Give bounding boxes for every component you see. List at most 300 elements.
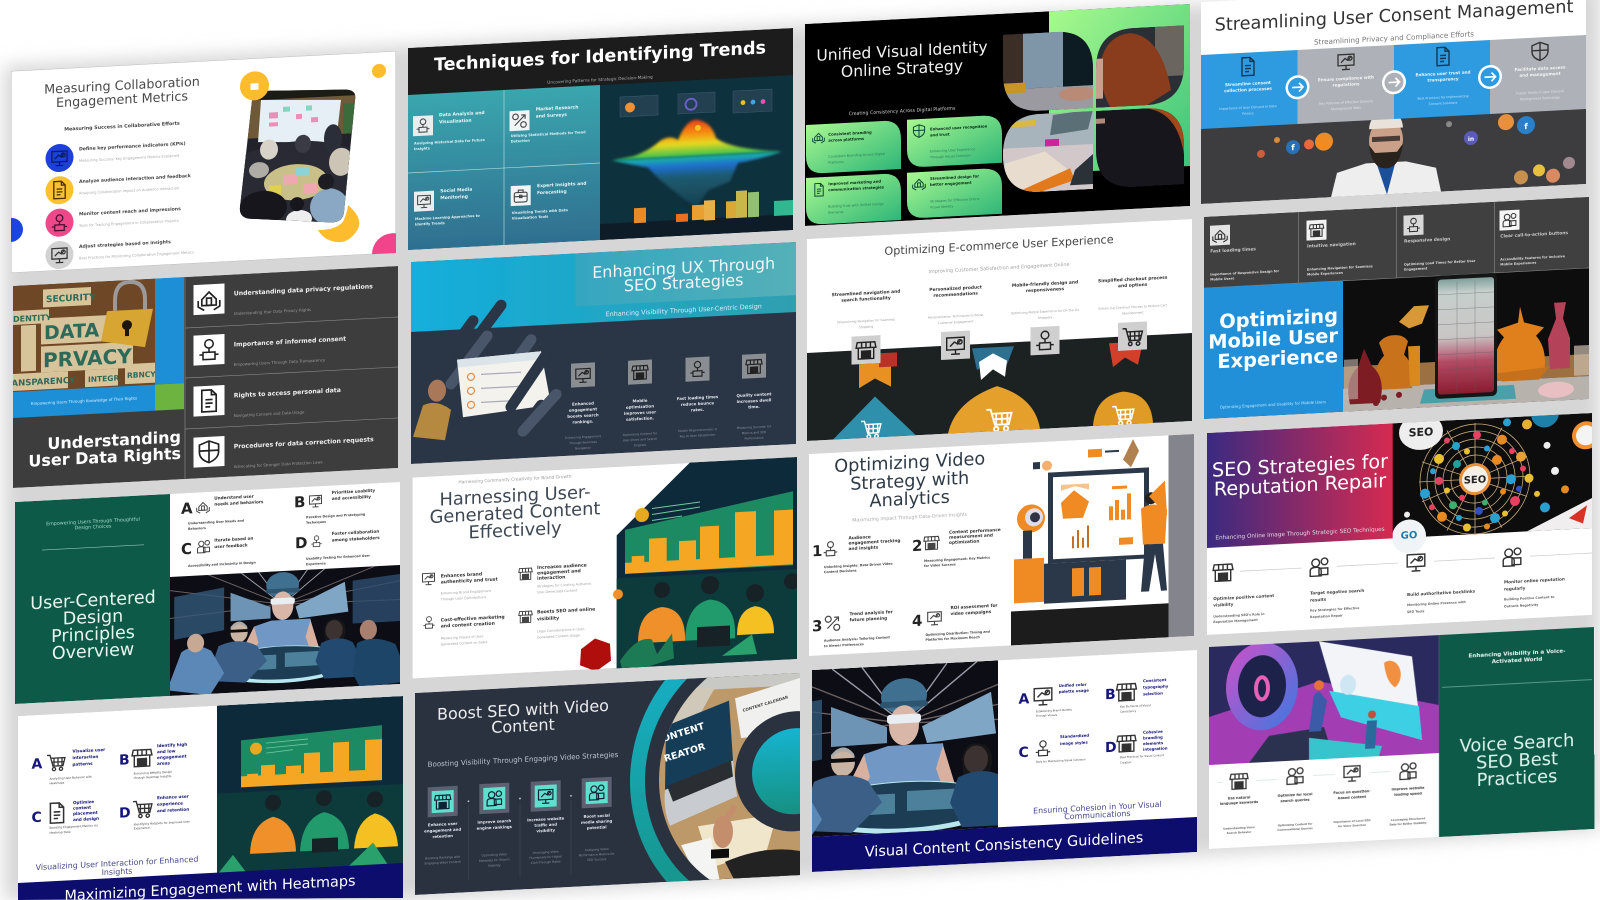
column: retention: Engaging Video Content [425,860,462,866]
item D: D [119,805,131,822]
tip: keywords: Search Behavior [1227,830,1252,835]
illustration: audience watching bar chart [613,457,800,669]
slide: Unified Visual Identity Online Strategy [805,4,1190,226]
column 2 [1318,53,1374,112]
metric row: adjust: Best Practices for Monitoring Collaborative Engagement Metrics [79,250,194,260]
step: positive content [1213,562,1274,624]
item: marketing: Generated Content on Sales [441,640,488,647]
side panel: SEO Best [1476,748,1558,774]
benefit: quality: increases dwell [737,397,772,404]
card: social media [414,186,480,227]
item 1 [812,533,900,575]
column: rankings: engine rankings [477,824,513,831]
item B: B [1105,687,1116,703]
item D: branding [1143,734,1163,740]
subheading: Maximizing Impact Through Data-Driven Insights [852,512,968,524]
illustration: analytics monitor and analyst [1014,437,1167,605]
subheading [1033,800,1162,823]
decorative yellow circle [372,64,386,78]
item A: Unified color [1059,682,1087,688]
principle C [181,535,256,568]
column: navigation: search functionality [841,295,891,304]
item D: integration [1143,746,1168,752]
metric row: KPIs: Define key performance indicators (KPIs) [79,141,186,152]
photo petal: red hair woman [1096,25,1184,109]
item D: Experience [134,826,150,830]
feature strip [1204,197,1589,288]
item 4 [912,603,998,643]
column 3 [1415,46,1471,107]
item: marketing: Measuring Impact of User- [441,634,485,641]
column: mobile-friendly [1011,279,1079,356]
card: expert insights [511,181,587,221]
card: market research: and Surveys [536,112,567,120]
tip: local: search queries [1280,798,1310,803]
principle B: Techniques [306,520,326,525]
item 1: 1 [812,542,822,560]
principle A: Understand user [214,494,255,501]
card: expert insights: Expert Insights and [537,181,587,189]
feature: fast loading: Mobile Users [1210,276,1234,282]
column: checkout: Abandonment [1122,310,1144,316]
column 3: transparency [1427,76,1459,83]
title box [576,242,796,306]
row: informed consent: Importance of informed consent [234,336,346,349]
feature: intuitive: Mobile Experiences [1307,271,1343,277]
card: branding: Platforms [828,160,844,165]
step: backlinks: SEO Tools [1407,609,1425,614]
column: mobile-friendly: Shoppers [1038,315,1053,320]
item: audience: User-Generated Content [537,588,578,594]
benefit: engagement: boosts search [567,412,599,419]
item A: Through Visuals [1035,713,1058,718]
column: rankings: Optimizing Video [482,852,507,858]
tip: loading speed [1389,762,1427,827]
column: retention: Boosting Rankings with [425,855,460,860]
title band [18,863,403,900]
column: checkout: and options [1118,282,1148,289]
side panel [15,494,170,704]
principle D: Experience [306,561,326,566]
item C: image styles [1060,740,1088,746]
card: data analysis: Insights [414,146,430,151]
feature: call to action: Mobile Experiences [1500,261,1536,267]
item: audience: engagement and [537,568,581,576]
GO badge [1392,519,1426,554]
heading [437,696,609,740]
item 3: future planning [850,615,887,623]
item: authenticity: Through User Contributions [440,595,486,602]
column: traffic: Increase website [527,816,565,822]
tip: loading speed: Improve website [1392,786,1425,792]
item C [32,799,99,836]
slide: Techniques for Identifying Trends [408,28,793,250]
item: authenticity: Enhances brand [441,571,482,580]
card: market research [510,104,586,144]
tip: local [1277,767,1313,832]
principle B: Iterative Design and Prototyping [306,512,366,519]
green accent [155,383,184,411]
photo: data privacy blocks and padlock: DATA [44,320,99,344]
benefit: engagement: Navigation [575,446,591,450]
item A: A [32,756,42,773]
row: informed consent: Empowering Users Through Data Transparency [234,357,326,367]
card: streamlined: better engagement [930,180,972,187]
chart image: rainbow data visualization [600,75,793,240]
blue side bar [155,277,184,385]
card: data analysis: Data Analysis and [439,110,485,118]
tip: local: Conversational Queries [1277,826,1313,832]
image: SEO network globe [1392,397,1600,554]
metric row: adjust: Adjust strategies based on insights [79,239,171,250]
item D [119,794,191,831]
bar chart on screen [247,739,382,778]
heading: Analytics [870,488,950,512]
row: correction: Procedures for data correction requests [234,436,374,451]
photo: man on phone with social icons: f [1291,143,1295,152]
benefit: quality: Metrics and SEO [742,430,767,435]
item 2: measurement and [949,532,993,541]
side panel: Enhancing Visibility in a Voice- [1469,648,1566,660]
photo: man on phone with social icons: in [1468,136,1474,143]
photo: data privacy blocks and padlock: RANSPARENCY [5,376,76,389]
photo: woman in helmet with team [732,645,1092,864]
photo: data privacy blocks and padlock: DENTITY [13,313,52,324]
benefit: quality: Quality content [737,391,772,398]
column 2: Ensure compliance with [1318,75,1374,82]
dashboard cards [620,89,772,119]
benefit: mobile: Engines [634,443,646,447]
item A: patterns [72,761,93,767]
column: retention [424,786,462,866]
step: negative results: results [1310,597,1327,603]
card: data analysis: Analyzing Historical Data for Future [414,138,486,146]
benefit: mobile [623,359,658,448]
principle A: needs and behaviors [214,499,264,507]
card: data analysis: Visualization [439,118,472,125]
card: data analysis [413,110,486,151]
item: audience: Increases audience [537,562,587,571]
card: branding: Consistent branding [828,130,872,137]
teal ring [630,605,950,900]
benefit: mobile: optimization [626,403,654,410]
feature: fast loading: Importance of Responsive Design for [1210,269,1279,277]
row: access: Rights to access personal data [234,387,341,400]
slide: Maximizing Engagement with Heatmaps [18,696,403,900]
principle A: Behaviors [188,526,206,531]
slide: Measuring Collaboration Engagement Metrics [11,51,396,273]
column: retention: retention [432,833,453,839]
card: social media: Machine Learning Approaches to [415,214,480,221]
audience [250,794,296,854]
illustration: diagonal bars and checklist [413,302,556,462]
item: audience: Strategies for Curating Authentic [537,582,592,588]
row: access: Navigating Consent and Data Usage [234,409,305,418]
subheading: Visualizing User Interaction for Enhanced [36,855,198,872]
heading: Harnessing User- [440,482,590,511]
dark inner ring [645,626,925,900]
SEO label: SEO [1464,474,1486,487]
column: rankings: Improve search [477,818,512,825]
feature: fast loading [1210,222,1279,282]
side panel: Overview [52,640,134,664]
item 1: Unlocking Insights: Data-Driven Video [824,562,893,569]
column 3: Enhance user trust and [1415,69,1471,77]
column: checkout [1098,275,1168,352]
benefit: engagement: Through Seamless [568,440,597,445]
subheading: Streamlining Privacy and Compliance Efforts [1314,29,1474,47]
title panel: Enhancing Online Image Through Strategic SEO Techniques [1215,527,1385,542]
feature: intuitive [1306,217,1373,277]
card: marketing [806,173,901,225]
tip: loading speed: Data for Better Visibility [1389,821,1427,827]
item B: Consistent [1143,677,1167,683]
item C: Boosting Engagement Metrics via [50,823,98,830]
illustration: audience watching bar chart [217,696,403,874]
item C: Standardized [1060,733,1089,739]
item: SEO: Generated Content Usage [537,633,580,639]
feature: responsive: Responsive design [1404,236,1450,245]
column: traffic: Leveraging Video [533,850,559,855]
item: marketing: Cost-effective marketing [441,614,505,624]
slide: Understanding User Data Rights [5,266,398,488]
card: streamlined: Streamlined design for [930,173,979,181]
title band [812,817,1197,872]
principle B [294,488,375,525]
benefit: engagement: Enhanced [572,400,594,407]
title panel [1207,423,1393,548]
heading: Strategy with [850,469,969,495]
item 4: Optimizing Distribution: Timing and [926,630,991,637]
card: marketing: Improved marketing and [828,179,881,186]
tip: keywords: Understanding Voice [1223,825,1255,831]
subheading: Measuring Success in Collaborative Efforts [64,121,180,133]
photo: phone and vases [1343,268,1589,412]
photo: laptop content creator: CONTENT CALENDAR [742,694,789,713]
principle A [181,493,264,531]
benefit: mobile: satisfaction. [626,415,654,422]
principle A: A [181,499,193,518]
column: social sharing: media sharing [581,818,613,825]
column: social sharing: SEO Success [587,857,607,862]
benefit: engagement: rankings. [572,418,594,425]
principle D [295,529,380,567]
benefit: engagement: Enhancing Engagement [565,434,602,440]
step: backlinks: Monitoring Online Presence with [1407,600,1467,607]
side panel [1439,627,1594,837]
feature: responsive: Engagement [1404,266,1428,272]
metric row: audience: Analyze audience interaction and feedback [79,173,192,185]
item B: areas [157,760,171,766]
illustration: shopping cart badges [833,378,1153,440]
item 2: Content performance [949,527,1001,536]
column: personalized: Personalization Techniques to Boost [928,313,984,320]
subheading: Communications [1064,809,1131,821]
principle B: B [294,493,305,511]
photo: team around table [240,90,356,222]
row: informed consent [194,328,346,369]
card: social media: Identify Trends [415,221,445,227]
metric row: reach [46,207,181,237]
card: marketing: Building Trust with Unified Design [828,202,884,209]
item 4: ROI assessment for [950,603,998,611]
item 3 [812,609,894,649]
column 4: Facilitate data access [1514,65,1566,72]
column: mobile-friendly: Optimizing Mobile Experience for On-the-Go [1011,308,1079,315]
item D: Cohesive [1143,729,1163,735]
item 3: 3 [812,617,822,635]
heading: Understanding [47,427,181,453]
column 1: Importance of User Consent in Data [1219,104,1277,111]
column 3: Best Practices for Implementing [1417,94,1469,101]
slide: Boost SEO with Video Content [415,605,950,900]
step: monitor: Building Positive Content to [1504,595,1555,602]
item D: Identifying Hotspots for Improved User [134,820,191,826]
item 4: 4 [912,612,922,630]
item A: Visualize user [72,747,106,754]
photo: man on phone with social icons: f [1524,122,1528,131]
item B: Key Elements of Visual [1120,703,1151,709]
heading: Engagement Metrics [56,89,188,111]
item B: engagement [157,754,187,760]
item 2: 2 [912,537,922,555]
heading: Online Strategy [841,57,963,81]
subheading: Creating Consistency Across Digital Platforms [849,106,956,117]
item 4: video campaigns [950,609,992,617]
subheading: Enhancing Visibility Through User-Centric Design [606,302,762,318]
title panel: Reputation Repair [1214,469,1386,501]
step: negative results: Reputation Repair [1310,613,1343,619]
side panel: Voice Search [1460,730,1574,757]
slide: Streamlining User Consent Management [1201,0,1586,204]
row: privacy regulations: Understanding data privacy regulations [234,283,373,298]
card: recognition: Enhancing User Experience [930,147,975,153]
feature: call to action [1500,207,1568,267]
heading: Measuring Collaboration [44,75,200,98]
metric row: KPIs [46,142,186,172]
side panel: Principles [51,623,135,647]
heading [28,427,181,471]
subheading: Improving Customer Satisfaction and Engagement Online [929,262,1069,275]
metric row: KPIs: Measuring Success: Key Engagement Metrics Explained [79,154,179,163]
benefit: loading: reduce bounce [681,400,714,407]
item 1: Content Decisions [824,569,857,574]
column: traffic: visibility [536,827,556,833]
photo: woman in helmet with team [160,549,417,705]
side panel: Activated World [1492,657,1542,665]
title panel: Experience [1217,344,1338,373]
item 3: to Viewer Preferences [824,642,864,648]
column: rankings [477,782,513,868]
principle C: user feedback [214,542,248,549]
card: branding [806,120,901,174]
column 2: Management Tools [1331,106,1361,111]
item A: interaction [72,754,98,760]
item B: typography [1143,683,1169,690]
slide: Enhancing UX Through SEO Strategies [411,242,796,464]
column: personalized: recommendations [933,291,978,299]
column: mobile-friendly: Mobile-friendly design and [1012,279,1078,289]
item C: placement [73,810,98,816]
slide: Optimizing E-commerce User Experience [807,219,1192,441]
heading: Unified Visual Identity [816,38,988,65]
item 2: Measuring Engagement: Key Metrics [924,556,990,563]
item: authenticity [422,570,498,602]
subheading: Boosting Visibility Through Engaging Video Strategies [428,750,619,769]
item C: content [73,805,91,811]
photo: data privacy blocks and padlock: INTEGR [88,373,119,384]
item 3: Trend analysis for [850,609,894,617]
metric row: adjust [46,240,194,269]
column: checkout: Enhancing Checkout Process to Reduce Cart [1099,303,1168,311]
item A: Heatmaps [50,781,65,785]
benefit: mobile: Optimizing Content for [623,431,658,437]
arrow 2 [1382,70,1406,95]
column: social sharing [579,777,615,862]
step: backlinks [1407,551,1476,614]
item A [32,747,106,786]
slide: SEO Strategies for Reputation Repair [1207,397,1600,635]
photo petal: design papers [1003,109,1093,198]
metric row: reach: Tools for Tracking Engagement in Collaborative Projects [78,219,179,228]
heading [45,76,199,109]
item D: Best Practices for Visual Content [1120,753,1164,759]
benefit: loading [677,356,719,439]
step: monitor [1503,546,1565,609]
principle D: D [295,534,307,552]
subheading: Uncovering Patterns for Strategic Decision-Making [547,74,653,85]
column: personalized: Personalized product [929,284,982,293]
item: authenticity: authenticity and trust [441,577,498,586]
grey edge band [1168,434,1194,637]
feature: intuitive: Intuitive navigation [1307,241,1356,250]
column 1: collection processes [1224,86,1272,93]
tip: keywords [1220,773,1258,835]
item C: Heatmap Data [50,830,71,835]
step: monitor: regularly [1504,585,1526,592]
card: recognition: Through Visual Cohesion [929,153,971,160]
item: audience [519,562,592,595]
heading [592,254,775,297]
step: positive content: Understanding SEO's Role in [1213,612,1265,619]
column: social sharing: potential [587,824,607,830]
heading: Techniques for Identifying Trends [434,38,766,76]
step: negative results: Key Strategies for Effective [1310,606,1359,613]
card: marketing: communication strategies [828,184,885,192]
tagline band [13,385,155,418]
tip: loading speed: loading speed [1394,791,1422,797]
item A: Establishing Brand Identity [1036,707,1072,713]
row: correction [194,428,374,471]
column 1 [1219,56,1277,117]
card: market research: Detection [511,139,530,144]
side panel: Practices [1477,766,1557,791]
item D: Creation [1120,760,1132,765]
principle B: and accessibility [332,494,371,501]
item 2 [912,527,1001,569]
column: navigation: Streamlined navigation and [832,289,900,298]
item: SEO: visibility [537,615,559,622]
item B: Consistency [1120,709,1137,714]
row: access [194,379,341,420]
card: recognition: Enhanced user recognition [930,124,988,131]
tip: keywords: language keywords [1220,800,1258,806]
icon badge [240,71,269,101]
card: marketing: Elements [828,210,844,215]
item B: selection [1143,690,1163,696]
panel: consent columns [1201,35,1586,129]
photo: laptop content creator: ONTENT [661,721,706,745]
